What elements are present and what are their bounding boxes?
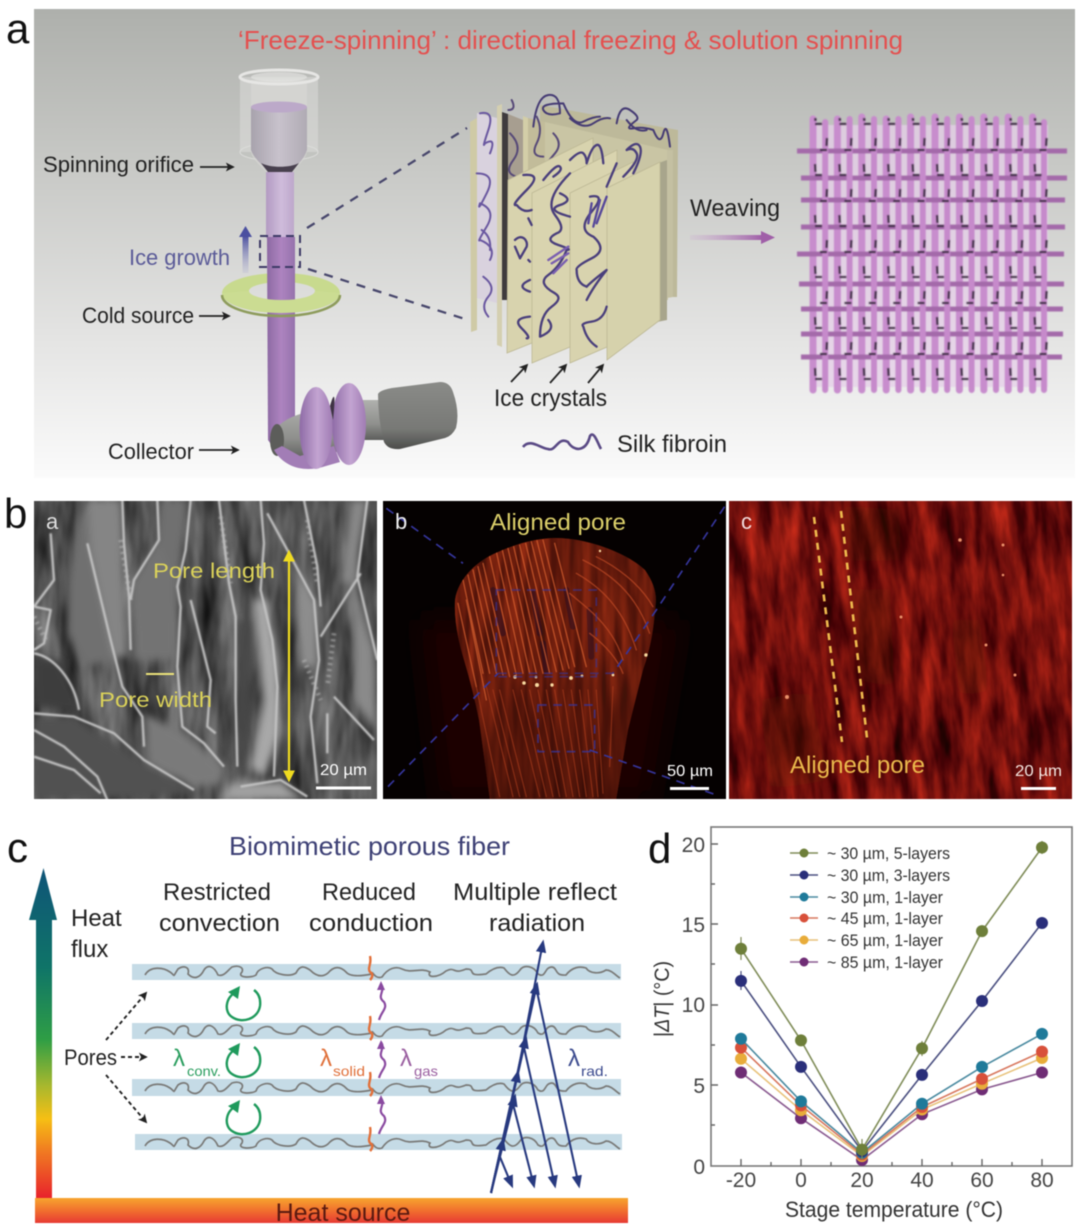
heat source bar xyxy=(35,1198,628,1223)
front ice sheet 1 xyxy=(507,138,593,353)
pores label: Pores xyxy=(64,1045,117,1070)
axis ticks xyxy=(711,844,1042,1166)
lambda gas: λ xyxy=(400,1045,412,1072)
lower purple tube xyxy=(267,237,295,450)
x tick labels: -20 xyxy=(726,1169,756,1192)
x tick labels: 20 xyxy=(850,1169,874,1192)
y tick labels: 20 xyxy=(682,834,705,857)
fibre layers xyxy=(132,964,622,1150)
fuzzy edges xyxy=(34,517,334,700)
dim halo xyxy=(420,620,680,800)
warp strands over xyxy=(825,119,1044,390)
plot frame xyxy=(711,827,1072,1166)
panel a background xyxy=(34,9,1075,478)
fibre cone xyxy=(450,535,660,805)
x tick labels: 60 xyxy=(970,1169,994,1192)
black background xyxy=(383,501,726,799)
dark patches xyxy=(760,505,990,790)
heading restricted convection: Restricted xyxy=(163,879,271,906)
collector rod xyxy=(360,382,457,449)
label aligned pore: Aligned pore xyxy=(490,509,626,535)
heading restricted convection: convection xyxy=(159,910,280,937)
lambda convection: λ xyxy=(173,1045,185,1072)
panel letter c: c xyxy=(7,824,28,871)
back ice sheets xyxy=(470,104,678,347)
lambda radiation: λ xyxy=(568,1045,580,1072)
legend: silk fibroin: Silk fibroin xyxy=(617,431,727,458)
label: collector: Collector xyxy=(108,439,194,464)
fibre streaks xyxy=(458,540,653,797)
bright specks xyxy=(785,538,1016,699)
heat flux arrow xyxy=(29,868,57,1198)
heading multiple reflect radiation xyxy=(453,879,617,937)
scale bar 50 um xyxy=(667,763,713,790)
scale bar 20 um xyxy=(1015,763,1062,790)
pores arrows xyxy=(106,993,146,1122)
label: collector xyxy=(108,439,238,464)
legend: silk fibroin xyxy=(523,431,727,458)
label aligned pore: Aligned pore xyxy=(790,752,925,779)
x tick labels: 80 xyxy=(1030,1169,1054,1192)
dashed selection box xyxy=(260,236,300,267)
x axis title: Stage temperature (°C) xyxy=(785,1197,1003,1222)
heading reduced conduction xyxy=(309,879,433,937)
pore width arrow xyxy=(146,673,174,675)
syringe cup xyxy=(240,70,318,172)
lower streaks xyxy=(476,687,613,797)
heading reduced conduction: conduction xyxy=(309,910,433,937)
woven fabric xyxy=(797,117,1067,390)
sub-label b: b xyxy=(395,509,407,534)
legend row 45 um: ~ 45 µm, 1-layer xyxy=(827,910,943,928)
ice growth arrow xyxy=(239,226,252,273)
panel c: biomimetic porous fibre diagram xyxy=(7,824,628,1227)
upper streaks xyxy=(458,540,586,700)
y tick labels: 0 xyxy=(693,1156,705,1179)
heading multiple reflect radiation: radiation xyxy=(489,910,585,937)
pore length arrow xyxy=(288,552,290,780)
dome side streaks xyxy=(570,557,653,673)
fibre coil xyxy=(274,383,366,469)
red background xyxy=(729,501,1072,799)
upper pale tube xyxy=(266,172,294,238)
series 30 um 5-layers xyxy=(735,841,1048,1160)
y tick labels: 15 xyxy=(682,914,705,937)
lower zoom frame xyxy=(538,705,595,752)
convection loops xyxy=(227,986,260,1134)
x tick labels: 0 xyxy=(795,1169,807,1192)
legend row 3-layers: ~ 30 µm, 3-layers xyxy=(827,867,950,885)
lower cone darkening xyxy=(478,692,634,800)
panel b-a: SEM image xyxy=(34,500,377,800)
scale bar 50 um: 50 µm xyxy=(667,763,713,780)
lambda gas: gas xyxy=(414,1063,438,1079)
ring underside edge xyxy=(222,295,340,316)
gas conduction wiggles xyxy=(377,981,385,1134)
red texture xyxy=(728,500,1072,800)
SEM ridges xyxy=(34,500,377,800)
series 30 um 1-layer xyxy=(735,1028,1048,1159)
heading reduced conduction: Reduced xyxy=(322,879,416,906)
heat flux label: flux xyxy=(71,936,108,963)
dark gaps xyxy=(493,590,591,670)
legend row 5-layers: ~ 30 µm, 5-layers xyxy=(827,845,950,863)
series 45 um 1-layer xyxy=(735,1042,1048,1160)
series 65 um 1-layer xyxy=(735,1052,1048,1162)
lambda radiation xyxy=(568,1045,608,1079)
panel b-c: fluorescence close-up xyxy=(728,500,1073,800)
label: spinning orifice: Spinning orifice xyxy=(43,152,194,177)
cold source ring front xyxy=(222,291,340,313)
series 85 um 1-layer xyxy=(735,1066,1048,1166)
weaving arrow xyxy=(690,231,775,244)
series 30 um 3-layers xyxy=(735,917,1048,1157)
panel c title: Biomimetic porous fiber xyxy=(229,831,510,861)
front ice sheet 2 xyxy=(532,150,617,363)
panel letter a: a xyxy=(6,5,30,52)
cone fill xyxy=(450,535,660,805)
SEM texture xyxy=(34,501,377,799)
warp strands under xyxy=(813,117,1033,390)
panel letter b: b xyxy=(4,490,27,537)
legend row 65 um: ~ 65 µm, 1-layer xyxy=(827,932,943,950)
top tangled fibres xyxy=(533,95,670,147)
lambda gas xyxy=(400,1045,438,1079)
SEM surface ribbons xyxy=(34,500,377,800)
label pore width: Pore width xyxy=(99,689,212,712)
ice crystal sheets with silk fibroin xyxy=(470,95,678,383)
panel a title: ‘Freeze-spinning’ : directional freezing & solution spinning xyxy=(238,25,903,55)
lambda convection xyxy=(173,1045,221,1079)
lambda solid: solid xyxy=(333,1063,365,1079)
sheet 3 fibres xyxy=(577,196,607,347)
dark fabric gaps xyxy=(808,118,1048,390)
scale bar 20 um: 20 µm xyxy=(1015,763,1062,780)
back fibres xyxy=(477,95,670,317)
y axis title: |ΔT| (°C) xyxy=(651,961,674,1037)
front ice sheet 4 xyxy=(607,162,660,360)
scale bar 20 um xyxy=(316,762,371,790)
panel a: freeze-spinning schematic xyxy=(6,5,1075,478)
weaving label: Weaving xyxy=(690,195,780,222)
cold source ring back xyxy=(222,273,340,313)
left sheet fibres xyxy=(477,113,492,317)
radiation arrows xyxy=(491,942,579,1193)
front ice sheet 3 xyxy=(570,162,633,363)
scale bar 20 um: 20 µm xyxy=(320,762,367,779)
cone texture xyxy=(450,535,660,805)
label: cold source: Cold source xyxy=(82,303,194,328)
blue zoom guides xyxy=(386,507,725,795)
aligned pore dashes xyxy=(814,511,867,742)
legend row 85 um: ~ 85 µm, 1-layer xyxy=(827,954,943,972)
chart legend xyxy=(790,845,950,972)
sub-label a: a xyxy=(46,509,59,534)
conduction marks xyxy=(369,956,372,1151)
heat source label: Heat source xyxy=(276,1199,410,1227)
fabric underlay xyxy=(810,125,1048,387)
collector cone xyxy=(270,405,345,460)
weft strands xyxy=(797,151,1067,357)
y tick labels: 5 xyxy=(693,1075,705,1098)
legend row 30 um: ~ 30 µm, 1-layer xyxy=(827,889,943,907)
x tick labels: 40 xyxy=(910,1169,934,1192)
zoom dashed lines xyxy=(307,128,468,320)
sheet 1 fibres xyxy=(515,175,534,338)
lambda convection: conv. xyxy=(187,1063,221,1079)
lambda solid: λ xyxy=(320,1045,332,1072)
label: ice crystals: Ice crystals xyxy=(494,385,607,412)
sheet 2 fibres xyxy=(540,173,570,337)
y tick labels: 10 xyxy=(682,994,705,1017)
heading multiple reflect radiation: Multiple reflect xyxy=(453,879,617,906)
bright spots xyxy=(513,550,648,687)
front fibres xyxy=(515,144,641,347)
panel b-b: fluorescence fibre image xyxy=(383,501,726,805)
label pore length: Pore length xyxy=(153,560,275,583)
upper sheet fibres xyxy=(543,144,641,187)
mid-tone ribbons xyxy=(34,500,377,800)
dark wall fibres xyxy=(508,100,559,177)
y tick labels xyxy=(682,834,705,1179)
panel d: line chart xyxy=(648,825,1072,1222)
lambda solid xyxy=(320,1045,365,1079)
label: ice growth: Ice growth xyxy=(129,245,230,270)
heat flux label: Heat xyxy=(71,905,122,932)
sub-label c: c xyxy=(741,509,752,534)
upper zoom frame xyxy=(496,590,613,677)
spinning apparatus xyxy=(222,70,457,469)
panel letter d: d xyxy=(648,825,671,872)
heading restricted convection xyxy=(159,879,280,937)
lambda radiation: rad. xyxy=(581,1063,608,1079)
x tick labels xyxy=(726,1169,1054,1192)
ice crystal arrows xyxy=(511,365,603,383)
